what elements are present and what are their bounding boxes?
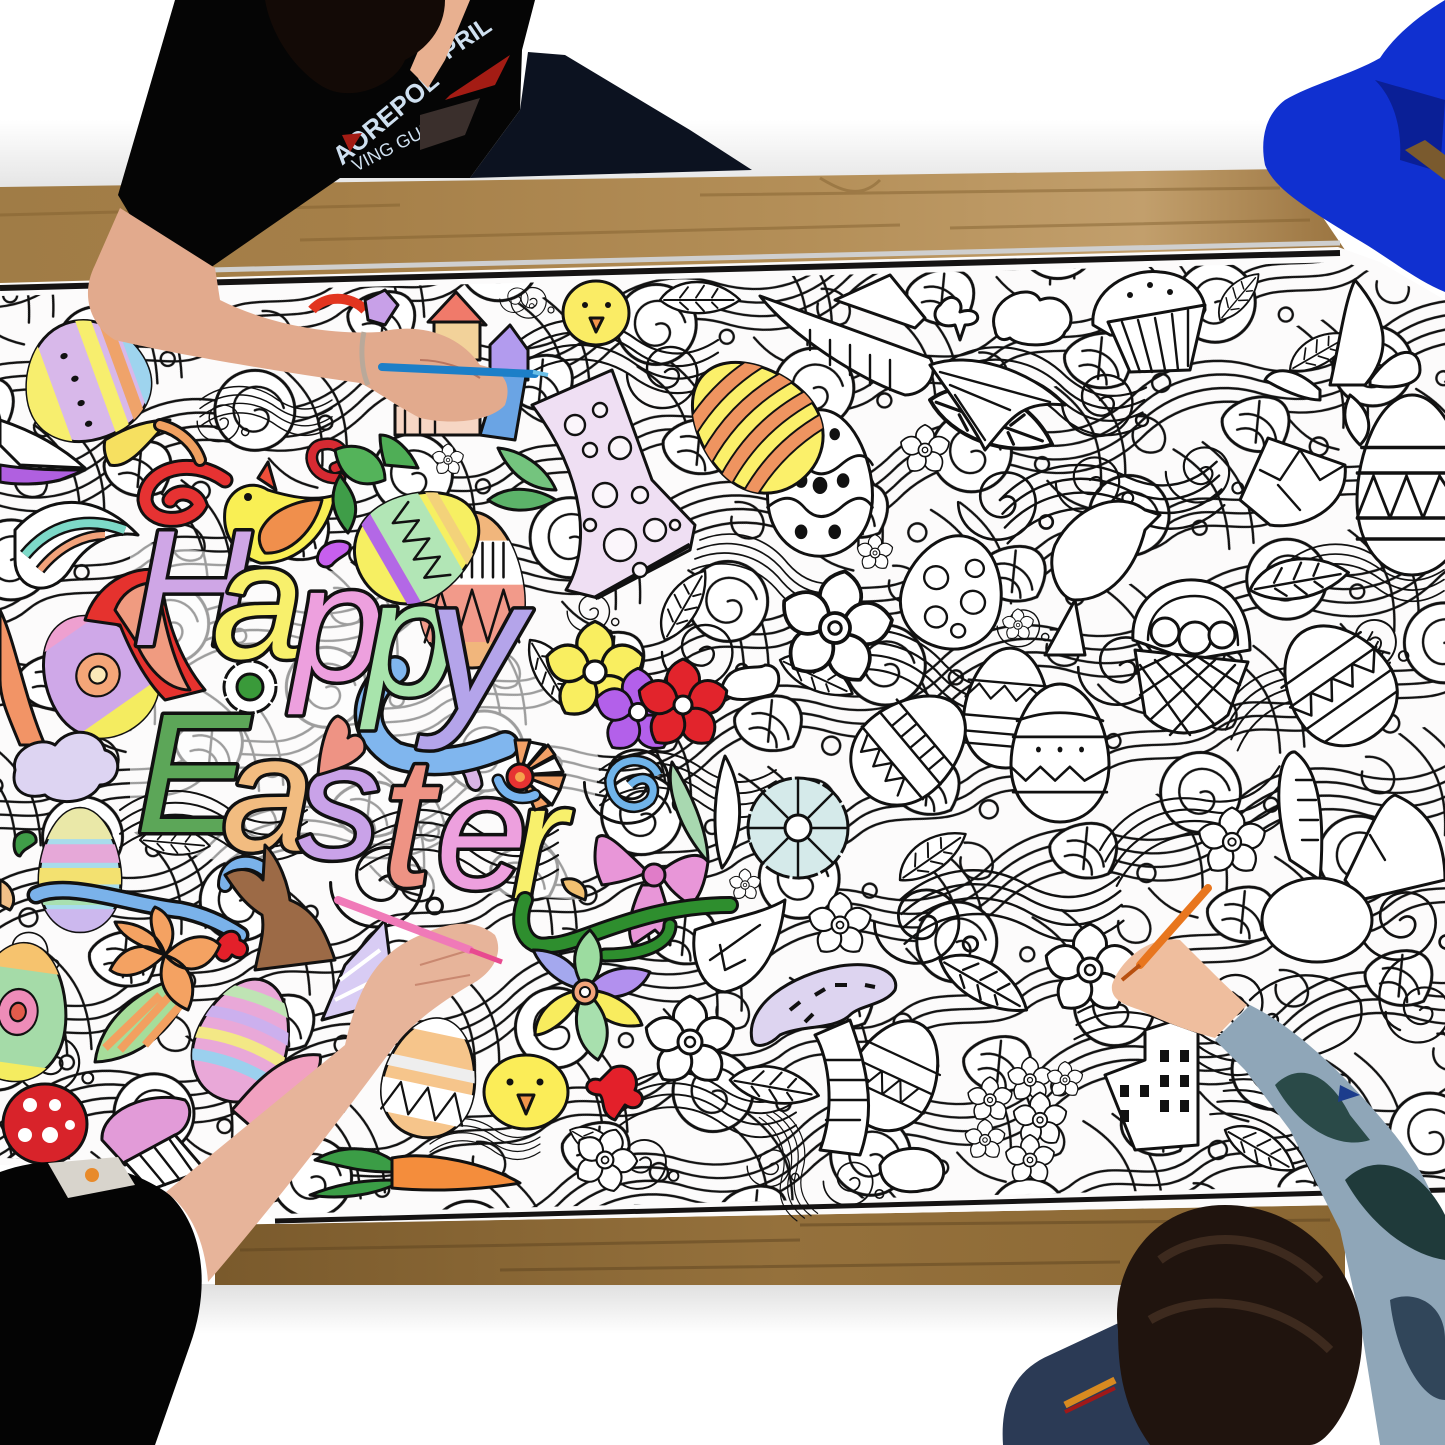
purple flower	[592, 668, 684, 757]
colored purple yellow egg top left	[25, 319, 152, 444]
colored yellow orange striped egg	[690, 360, 825, 495]
child hand	[1112, 939, 1247, 1038]
colored orange striped egg behind	[414, 512, 530, 668]
yellow chick top	[563, 281, 629, 345]
colored top left bits	[0, 290, 398, 484]
orange star flower and striped leaf	[95, 907, 220, 1062]
doodle texture layer two	[0, 262, 1445, 1214]
wooden table top band	[0, 169, 1345, 290]
HAPPY EASTER lettering: H	[132, 496, 252, 680]
shirt print: VING GUM	[349, 116, 439, 176]
doodle texture layer one	[0, 262, 1445, 1214]
blue ribbon behind y	[369, 670, 505, 761]
child hair	[1117, 1205, 1362, 1445]
HAPPY EASTER lettering: e	[436, 739, 528, 923]
line art butterfly	[1265, 280, 1420, 445]
HAPPY EASTER lettering: t	[382, 719, 440, 925]
line art flowers	[431, 425, 1269, 1203]
pale blue daisy	[748, 778, 848, 878]
colored rainbow egg left	[35, 803, 125, 934]
top man hair	[265, 0, 470, 93]
HAPPY EASTER lettering: p	[359, 546, 456, 730]
top man arm and hand	[88, 208, 508, 422]
lighter area behind lettering	[130, 540, 600, 900]
blue hoodie top right	[1263, 0, 1445, 292]
lilac cloud	[14, 732, 118, 802]
line art clouds and clovers	[722, 292, 1071, 1192]
pink bow	[595, 836, 708, 945]
pink cupcake	[102, 1097, 205, 1190]
large egg far right	[1357, 395, 1445, 575]
red small flower	[215, 931, 642, 1120]
colored house top	[395, 292, 528, 440]
egg basket	[1133, 580, 1250, 735]
shirt print	[327, 12, 497, 176]
zigzag egg 2	[1011, 684, 1109, 822]
wooden table bottom band	[215, 1205, 1345, 1285]
HAPPY EASTER lettering: s	[298, 709, 380, 893]
zigzag egg	[959, 645, 1055, 771]
shirt patch	[48, 1157, 135, 1198]
shirt print: AOREPOL	[327, 65, 444, 171]
orange marker	[1122, 888, 1208, 980]
blue ribbon near bunny	[36, 863, 265, 935]
orange white daisy	[498, 740, 565, 810]
striped egg tilted	[831, 671, 989, 825]
line art background swirls	[0, 265, 1445, 1225]
line art eggs	[768, 395, 1445, 1145]
line art broken egg and bird	[1045, 438, 1345, 655]
blue swirl	[610, 761, 658, 807]
green leaves near boot	[488, 448, 556, 510]
coloring poster paper	[0, 243, 1445, 1224]
coral heart	[318, 716, 365, 775]
brown bunny silhouette	[225, 845, 335, 970]
colored green yellow egg	[352, 490, 480, 606]
yellow flower	[541, 621, 649, 724]
HAPPY EASTER lettering: a	[212, 509, 304, 693]
bottom left arm and hand	[166, 924, 498, 1282]
HAPPY EASTER lettering	[132, 496, 573, 933]
bottom right child hood	[1003, 1320, 1150, 1445]
camo sleeve	[1215, 1005, 1445, 1445]
multicolour flower lower	[533, 930, 650, 1060]
town house sketch	[1105, 1022, 1198, 1150]
ladybug egg	[890, 524, 1016, 660]
colored rainbow flame left	[0, 502, 205, 745]
colored purple flower egg	[42, 614, 158, 739]
HAPPY EASTER lettering: p	[287, 531, 384, 715]
blue marker	[382, 367, 548, 375]
egg lower centre	[832, 1005, 958, 1145]
line art carrot and shoe	[760, 275, 1065, 450]
top man shirt	[118, 0, 752, 268]
HAPPY EASTER lettering: y	[417, 539, 533, 751]
HAPPY EASTER lettering: a	[222, 701, 314, 885]
lilac mushroom	[751, 965, 896, 1155]
colored carrot	[310, 1149, 520, 1197]
green flower ring	[224, 661, 276, 713]
pink polka dot boot	[532, 370, 695, 598]
lilac zigzag sock	[232, 920, 395, 1130]
green vine	[521, 879, 785, 992]
colored red swirl with yellow bird	[145, 435, 418, 563]
line art cupcake	[1093, 272, 1205, 372]
green leaves pair	[670, 756, 740, 868]
egg: black dots	[768, 410, 872, 556]
pink marker	[338, 900, 502, 962]
HAPPY EASTER lettering: r	[512, 749, 573, 933]
HAPPY EASTER lettering: E	[136, 679, 251, 869]
yellow chick bottom	[484, 1055, 568, 1129]
colored orange zigzag egg	[380, 1017, 476, 1140]
colored round egg lower left	[0, 942, 68, 1082]
bottom left shirt	[0, 1157, 202, 1445]
red ladybird egg	[3, 1084, 87, 1164]
red flower	[634, 659, 732, 752]
coloured beans and small leaf	[0, 541, 482, 910]
egg right	[1259, 602, 1417, 766]
colored striped pink egg	[190, 978, 290, 1104]
tri-colour flower cluster	[541, 621, 732, 757]
shirt print: PRIL	[436, 12, 497, 65]
line art bunny face	[1250, 752, 1445, 1140]
